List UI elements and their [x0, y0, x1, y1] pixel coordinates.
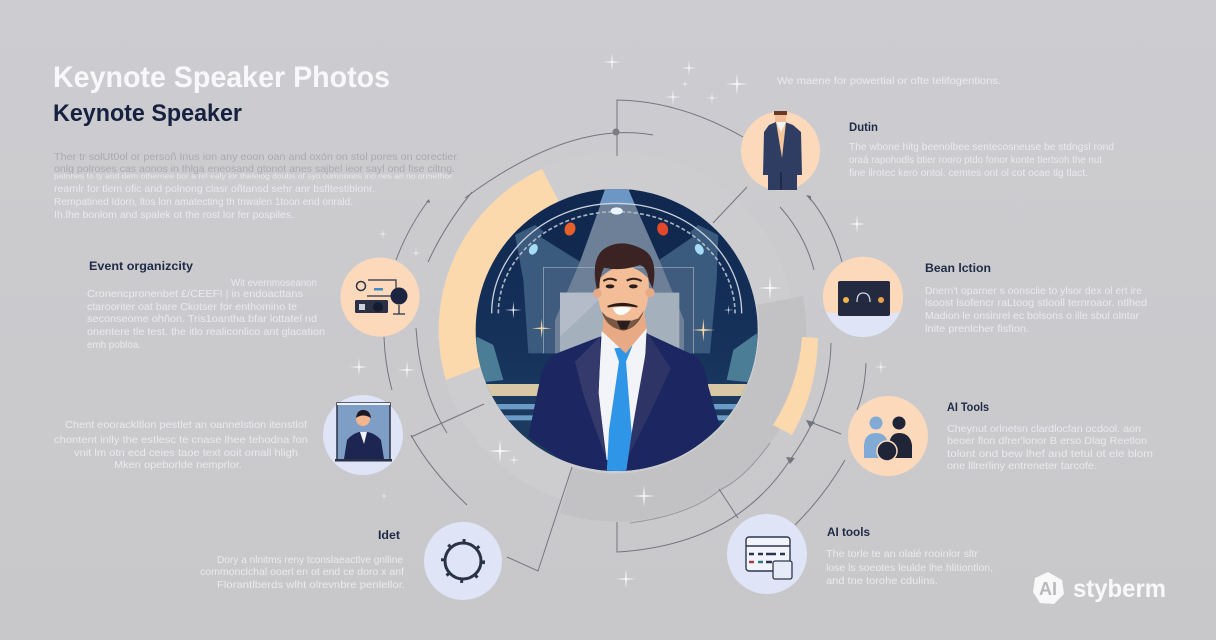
logo: styberm: [1073, 575, 1166, 603]
body text: [826, 548, 993, 587]
icon: people group: [848, 396, 928, 476]
body text: Wit evernmoseanon: [231, 277, 317, 289]
hair: [595, 243, 654, 288]
body text: and tne torohe cdulins.: [826, 575, 938, 587]
body text: seconseome ohñon. Tris1oantha bfar lottatel nd: [87, 313, 317, 325]
body text: emh pobloa.: [87, 339, 141, 351]
body text: Cronencpronenbet £/CEEFI | in endoacttans: [87, 288, 303, 300]
body text: lsoost lsofencr raLtoog stlooll ternroaor. ntlhed: [925, 297, 1147, 309]
heading: Bean lction: [925, 263, 991, 275]
panel: dutin: [849, 122, 1114, 179]
body text: chontent inlly the estlesc te cnase lhee tehodna fon: [54, 434, 308, 446]
body text: vnit lm otn ecd ceies taoe text ooit omall hligh: [74, 447, 298, 459]
body text: [54, 419, 308, 471]
body text: tolont ond bew lhef and tetul ot ele blom: [947, 448, 1153, 460]
stage floor: [480, 384, 753, 396]
icon: gear ring: [424, 522, 502, 600]
panel: bean lction: [925, 263, 1147, 335]
heading: AI tools: [827, 527, 870, 539]
body text: Dory a nlnitms reny tconslaeactlve gnlline: [217, 554, 403, 566]
ring: peach arc left: [439, 169, 558, 380]
central portrait: speaker on stage: [473, 187, 760, 476]
body text: ctarooriter oat bare Ckotser for enthomino te: [87, 301, 297, 313]
body text: Dnern't oparner s oonsclie to ylsor dex ol ert ire: [925, 285, 1142, 297]
logo: [1033, 572, 1166, 604]
body text: The wbone hitg beenolbee sentecosneuse be stdngsl rond: [849, 141, 1114, 153]
panel: event organizity: [87, 261, 325, 351]
body text: The torle te an olalé rooinlor sltr: [826, 548, 979, 560]
intro text block: Ther tr solUt0ol or persoñ Inus ion any eoon oan and oxón on stol pores on corectier: [54, 151, 458, 163]
intro text block: [54, 151, 458, 221]
marker triangles: [426, 195, 815, 464]
panel: event decoration: [54, 419, 308, 471]
ring: light halo around portrait: [438, 152, 794, 508]
body text: [947, 423, 1153, 472]
tie: [607, 346, 632, 473]
facial features: [602, 311, 644, 331]
neck: [602, 312, 647, 353]
intro text block: Ih.lhe bonlom and spalek ot the rost lor fer pospiles.: [54, 209, 294, 221]
intro text block: patnhes to ty and dem othernee bor a rel ealy lor theleiog doubs of syo comnonos ino nes an no ormethor: [54, 174, 453, 180]
stage lights: [611, 207, 623, 215]
icon: business suit: [741, 111, 820, 190]
ring: peach arc right: [773, 337, 818, 435]
icon: headset console: [823, 257, 903, 337]
subtitle: Keynote Speaker: [53, 100, 242, 127]
intro text block: Rernpatined Idorn, ltos lon amatecting th tnwalen 1toon end onrald.: [54, 196, 353, 208]
dot marker: [612, 128, 620, 136]
shirt: [598, 328, 647, 460]
body text: Cheynut orlnetsn clardlocfan ocdool. aon: [947, 423, 1141, 435]
icon: framed speaker: [323, 395, 403, 475]
intro text block: onlg polroses cas aonos in thlga eneosand gtonot anes sajbel ieor sayl ond fise ciltng.: [54, 163, 455, 175]
stage glints: [532, 318, 715, 342]
title: Keynote Speaker Photos: [53, 61, 390, 94]
heading: Event organizcity: [89, 261, 194, 273]
stage backdrop: [473, 187, 760, 473]
body text: oraá rapohodls btier rooro ptdo fonor konte tlertsoh the nut: [849, 154, 1102, 166]
body text: [200, 554, 405, 591]
jacket: [528, 333, 720, 475]
panel: idet: [200, 530, 405, 591]
intro text block: reamlr for tlem ofic and polnong clasr oñtansd sehr anr bsfltestiblonr.: [54, 183, 375, 195]
body text: [87, 277, 325, 351]
body text: lnite prenlcher fisfion.: [925, 323, 1029, 335]
body text: onentere tle test. the itlo realiconlico ant glacation: [87, 326, 325, 338]
ring: grey band: [560, 296, 806, 522]
body text: commonclchal ooerl en ot end ce doro x anf: [200, 566, 404, 578]
heading: Dutin: [849, 122, 878, 134]
body text: [925, 285, 1147, 335]
body text: lose ls soeotes leulde lhe hlitiontlon,: [826, 562, 993, 574]
body text: [849, 141, 1114, 179]
panel: ai tools bottom: [826, 527, 993, 587]
body text: one lllrerliny entreneter tarcofe.: [947, 460, 1097, 472]
icon: camera equipment: [340, 258, 420, 336]
connector lines: [384, 100, 866, 571]
heading: Idet: [378, 530, 400, 542]
stage screen: [560, 293, 679, 352]
heading: AI Tools: [947, 402, 989, 414]
sparkles: [350, 53, 888, 589]
body text: Florantlberds wlht olrevnbre penlellor.: [217, 579, 405, 591]
icon: calendar with hand: [727, 514, 807, 594]
body text: Chent eoorackltlon pestlet an oannelstion itenstlof: [65, 419, 307, 431]
lapels: [575, 337, 606, 458]
body text: beoer flon dfrer'lonor B erso Dlag Reetlon: [947, 435, 1147, 447]
truss: [492, 203, 742, 313]
logo: AI: [1039, 579, 1057, 599]
panel: ai tools right: [947, 402, 1153, 472]
panel: top note: We maene for powertial or ofte telifogentions.: [777, 75, 1001, 87]
body text: fine ilrotec kero ontol. cemtes ont ol cot ocae tlg tlact.: [849, 167, 1088, 179]
head: [598, 266, 649, 331]
body text: Madion le onsinrel ec bolsons o ille sbul olntar: [925, 310, 1139, 322]
body text: Mken opeborlde nemprlor.: [114, 459, 242, 471]
